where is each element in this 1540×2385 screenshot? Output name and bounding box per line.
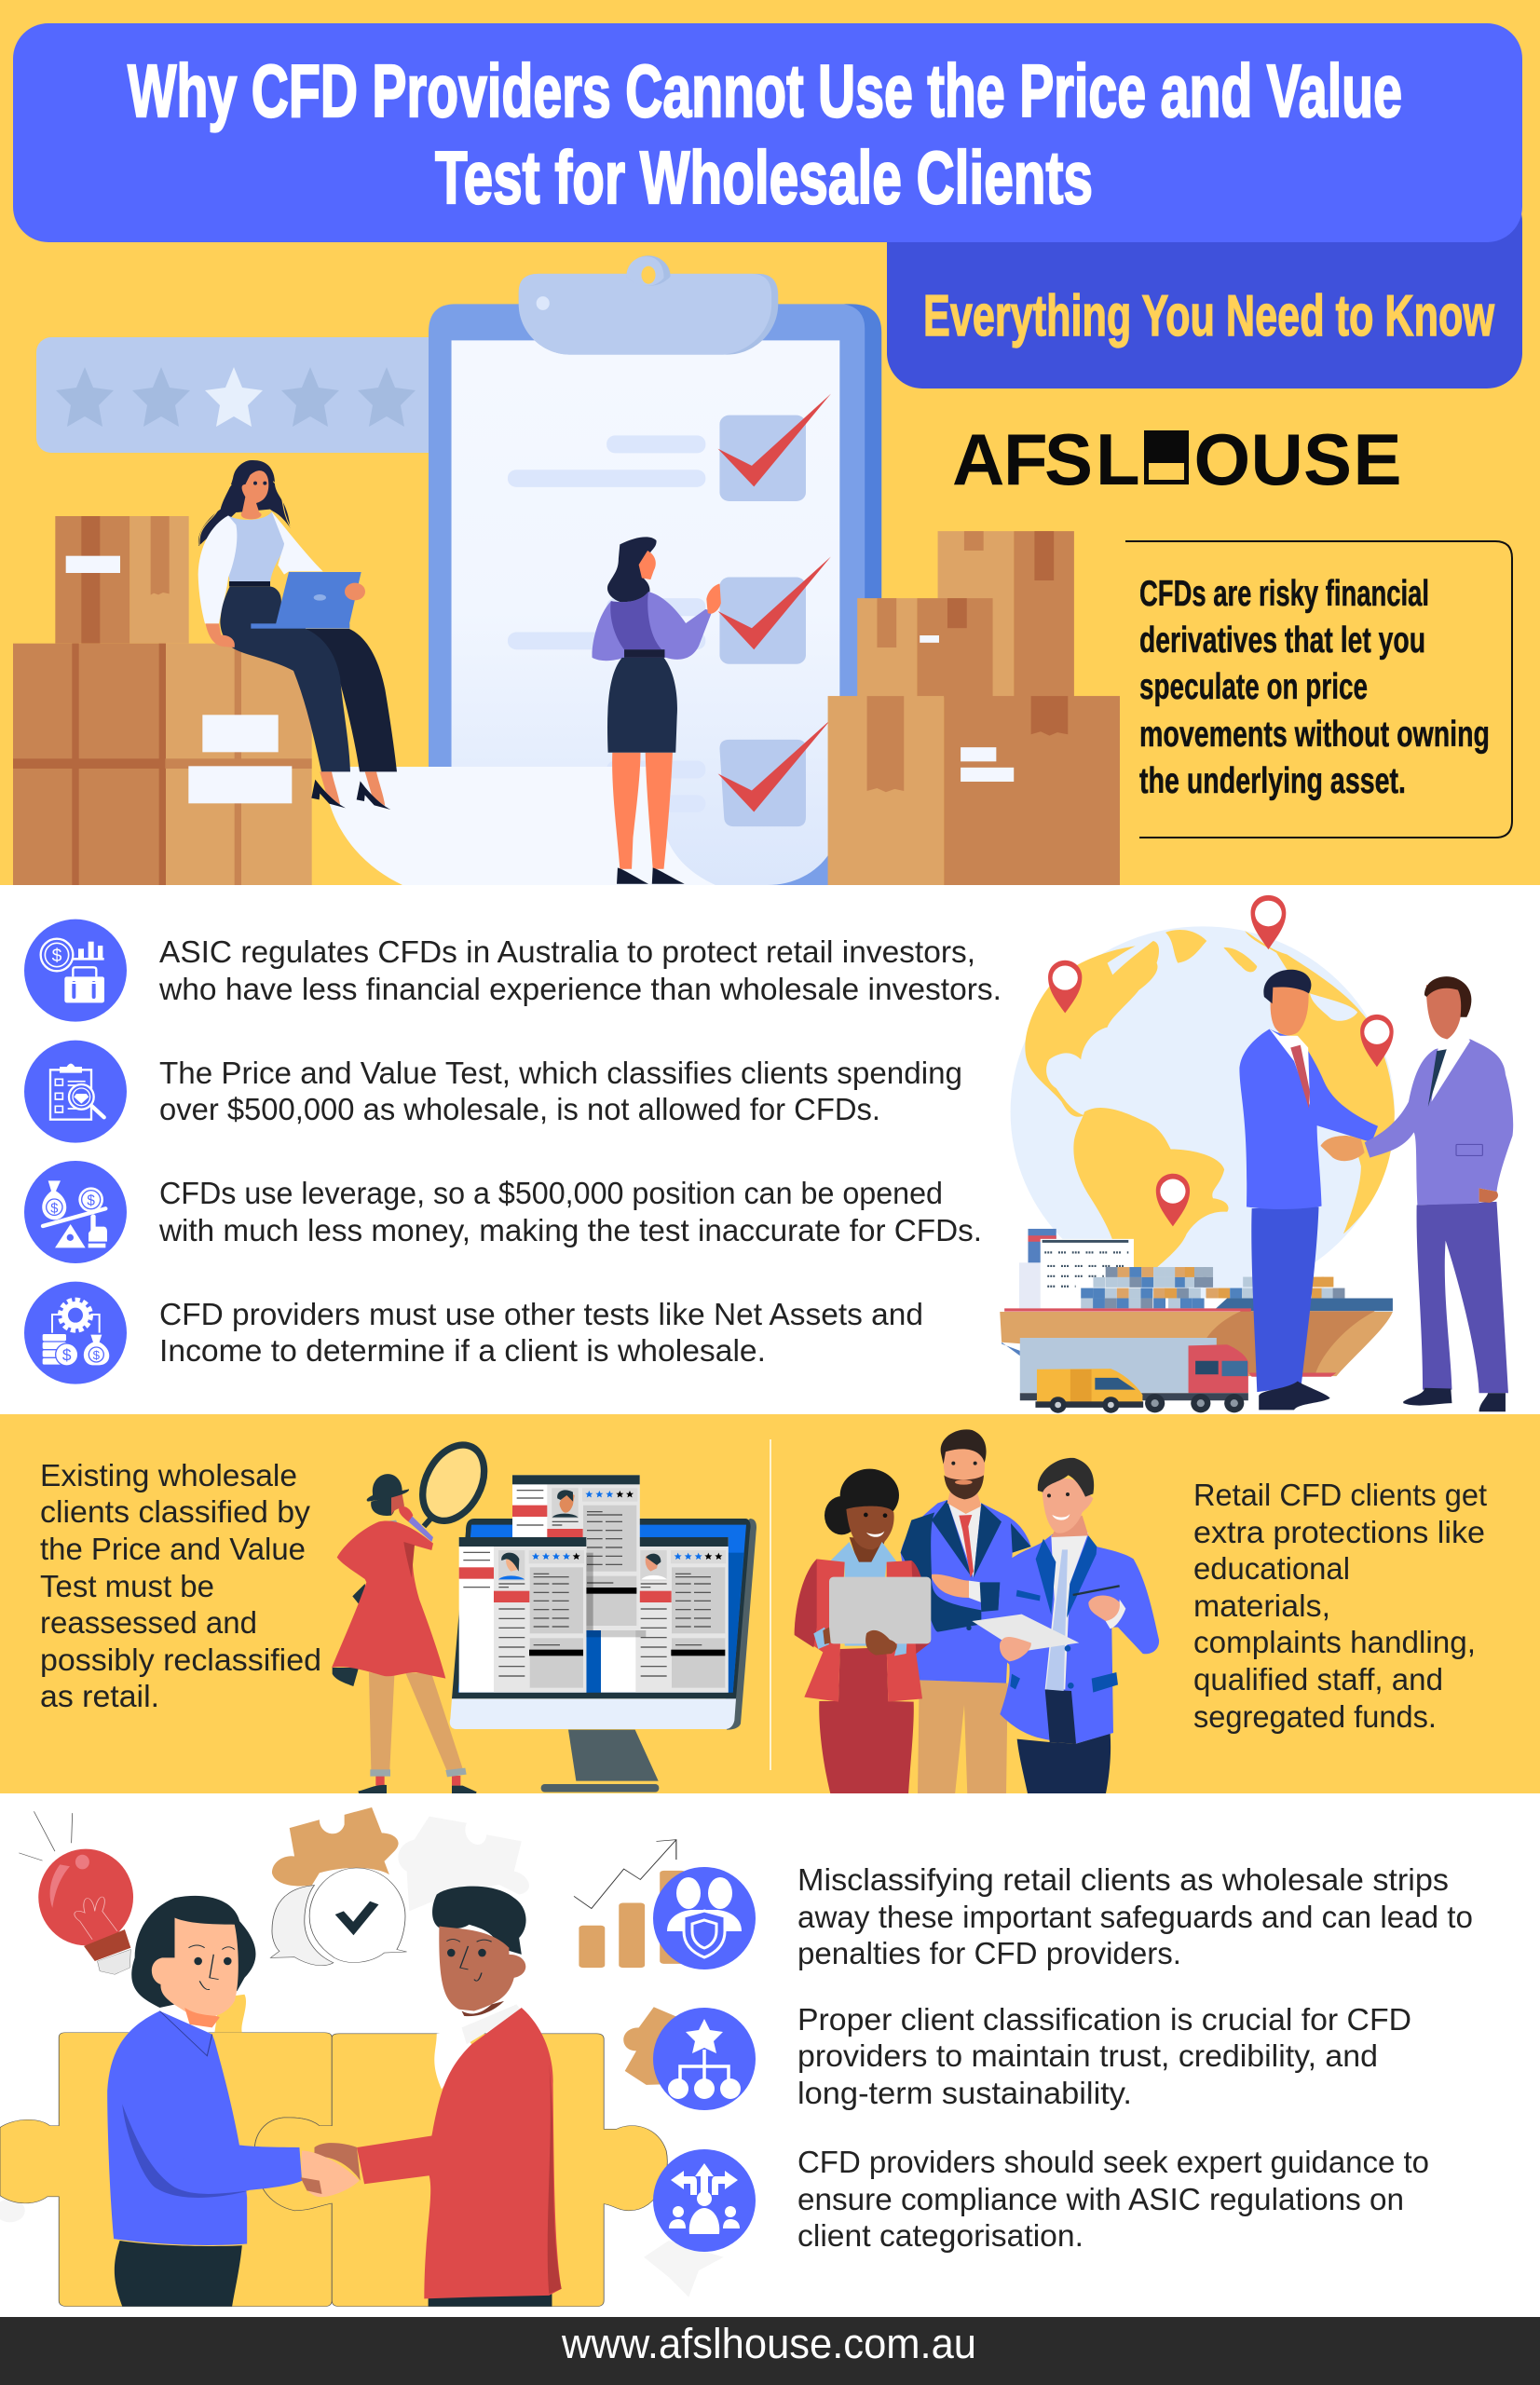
woman in red suit [795, 1469, 931, 1795]
illustration: globe, ship, trucks and businessmen shaking hands [1000, 895, 1513, 1413]
icon: people with shield [653, 1867, 756, 1969]
title text: Test for Wholesale Clients [435, 136, 1093, 219]
text block: proper client classification: providers to maintain trust, credibility, and [797, 2038, 1378, 2073]
logo: AFSL HOUSE [952, 418, 1402, 500]
paper scroll [323, 767, 715, 885]
text block: existing wholesale clients: reassessed and [40, 1605, 257, 1640]
text block: retail client protections: materials, [1193, 1588, 1330, 1623]
growth chart [574, 1840, 686, 1968]
businessman in blue suit [1239, 970, 1378, 1410]
text block: key points about CFD regulation: with much less money, making the test inaccurate for CFDs. [158, 1213, 982, 1247]
icon: balance scale with money: $ [50, 1201, 58, 1216]
rating stars [532, 1491, 702, 1560]
yellow band background [0, 1414, 1540, 1793]
text block: retail client protections: qualified staff, and [1193, 1662, 1443, 1697]
text block: existing wholesale clients: Existing wholesale [40, 1458, 297, 1492]
handshake hands [300, 2143, 361, 2197]
check marks [718, 394, 831, 812]
footer bar with website: www.afslhouse.com.au [561, 2320, 976, 2367]
illustration: stacked boxes left [13, 516, 312, 885]
text block: proper client classification: Proper client classification is crucial for CFD [797, 2002, 1411, 2037]
text block: misclassifying retail clients [797, 1862, 1473, 1970]
map pins [1048, 895, 1394, 1226]
callout text: the underlying asset. [1139, 761, 1406, 801]
top yellow hero background [0, 0, 1540, 885]
icon column [24, 920, 127, 1384]
text block: key points about CFD regulation: over $500,000 as wholesale, is not allowed for CFDs. [159, 1092, 880, 1126]
text block: key points about CFD regulation: The Price and Value Test, which classifies clients spending [159, 1056, 962, 1090]
text block: retail client protections: segregated funds. [1193, 1699, 1437, 1734]
clipboard with checklist [429, 255, 881, 885]
text block: key points about CFD regulation: who have less financial experience than wholesale investors. [158, 972, 1002, 1006]
footer bar with website [0, 2317, 1540, 2385]
globe [1011, 926, 1395, 1298]
text block: misclassifying retail clients: penalties for CFD providers. [797, 1936, 1181, 1970]
callout text: CFDs are risky financial [1139, 574, 1429, 614]
icon: star and hierarchy [653, 2008, 756, 2110]
illustration: monitor with client profiles [450, 1475, 756, 1792]
text block: key points about CFD regulation: CFDs use leverage, so a $500,000 position can be opened [159, 1176, 943, 1210]
text block: seek expert guidance: CFD providers should seek expert guidance to [797, 2145, 1429, 2179]
illustration: woman in red dress with magnifier [332, 1435, 497, 1795]
yellow puzzle pieces [0, 2033, 667, 2307]
man in blue blazer [972, 1458, 1159, 1795]
icon: balance scale with money [24, 1161, 127, 1263]
illustration: puzzle handshake [0, 1807, 724, 2307]
text block: existing wholesale clients: possibly reclassified [40, 1642, 321, 1677]
text block: retail client protections: educational [1193, 1551, 1350, 1586]
text block: misclassifying retail clients: Misclassifying retail clients as wholesale strips [797, 1862, 1449, 1897]
cargo ship [1000, 1229, 1393, 1377]
icon: coin, chart and briefcase [24, 920, 127, 1022]
icon: gear with coins: $ [62, 1346, 72, 1365]
text block: key points about CFD regulation: Income to determine if a client is wholesale. [159, 1333, 766, 1368]
text block: seek expert guidance: ensure compliance with ASIC regulations on [797, 2182, 1404, 2216]
title text [128, 49, 1402, 219]
text block: seek expert guidance: client categorisation. [797, 2218, 1083, 2253]
illustration: woman standing at clipboard [593, 537, 721, 884]
illustration: woman sitting with laptop [198, 460, 397, 810]
logo: AFSL HOUSE: OUSE [1194, 418, 1402, 500]
bottom white section background [0, 1793, 1540, 2317]
text block: retail client protections: complaints handling, [1193, 1625, 1476, 1659]
icon: balance scale with money: $ [87, 1193, 95, 1209]
logo: AFSL HOUSE: AFSL [952, 418, 1140, 500]
icon: gear with coins: $ [93, 1348, 101, 1362]
title banner shadow tab: subtitle [887, 186, 1522, 388]
callout text: speculate on price [1139, 667, 1368, 707]
text block: key points about CFD regulation: CFD providers must use other tests like Net Assets and [159, 1297, 923, 1331]
text block: existing wholesale clients: the Price and Value [40, 1532, 306, 1566]
title banner [13, 23, 1522, 242]
yellow van [1035, 1369, 1143, 1413]
text block: existing wholesale clients: clients classified by [40, 1494, 311, 1529]
clipboard clip [519, 255, 778, 355]
text block: proper client classification [797, 2002, 1411, 2110]
icon: gear with coins [24, 1282, 127, 1384]
icon: arrows and leader [653, 2149, 756, 2252]
checklist lines [508, 435, 705, 812]
text block: retail client protections: Retail CFD clients get [1193, 1478, 1487, 1512]
checkboxes [719, 416, 806, 826]
text block: key points about CFD regulation [158, 934, 1002, 1368]
star rating panel [36, 337, 446, 453]
text block: existing wholesale clients: as retail. [40, 1679, 159, 1713]
handshake [1320, 1136, 1365, 1161]
callout text: derivatives that let you [1139, 620, 1425, 661]
text block: proper client classification: long-term sustainability. [797, 2076, 1132, 2110]
icon: clipboard and magnifier [24, 1041, 127, 1143]
man in blue shirt [107, 1896, 302, 2307]
text block: existing wholesale clients: Test must be [40, 1569, 214, 1603]
illustration: stacked boxes right [828, 531, 1120, 885]
text block: seek expert guidance [797, 2145, 1429, 2253]
background puzzle pieces [0, 1807, 724, 2297]
callout text [1139, 574, 1490, 801]
man in red jacket [357, 1887, 562, 2307]
divider [770, 1439, 771, 1770]
text block: misclassifying retail clients: away these important safeguards and can lead to [797, 1900, 1473, 1934]
illustration: three business people [795, 1429, 1159, 1795]
speech bubbles with check [270, 1868, 407, 1966]
businessman in purple suit [1365, 976, 1513, 1411]
profile faces [498, 1490, 667, 1579]
white section background [0, 885, 1540, 1414]
text block: key points about CFD regulation: ASIC regulates CFDs in Australia to protect retail investors, [159, 934, 975, 969]
light bulb [19, 1811, 133, 1974]
text block: retail client protections [1193, 1478, 1487, 1734]
text block: retail client protections: extra protections like [1193, 1515, 1485, 1549]
icon: coin, chart and briefcase: $ [52, 947, 62, 966]
truck [1020, 1338, 1248, 1412]
man with beard [901, 1429, 1031, 1795]
text block: existing wholesale clients [40, 1458, 321, 1713]
callout: what CFDs are [1125, 541, 1512, 838]
